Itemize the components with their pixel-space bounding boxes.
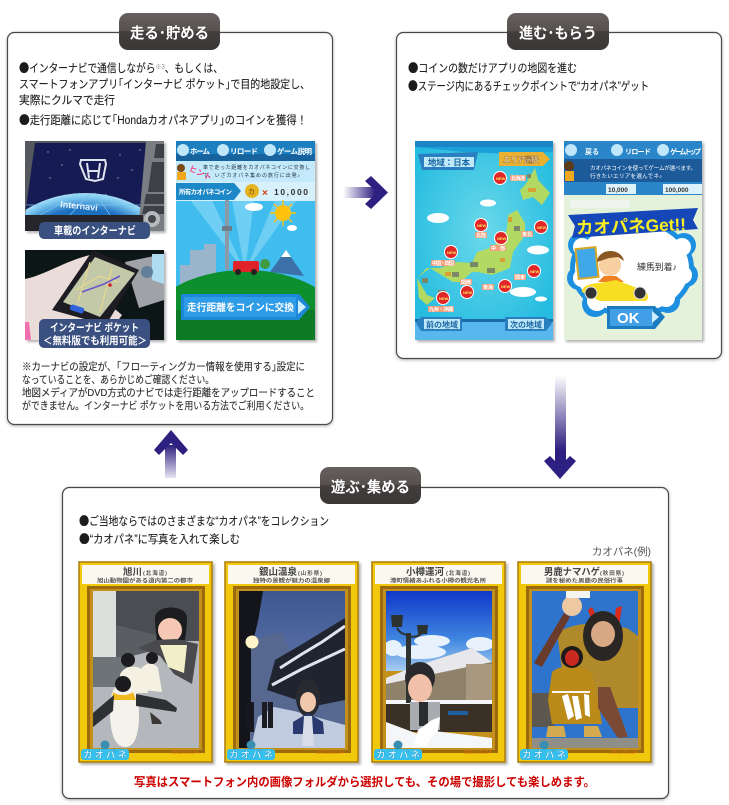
heading: 走る・貯める: 走る･貯める [130, 25, 209, 42]
card: 旭川: カオパネ [83, 750, 127, 761]
label: 車載のインターナビ [39, 222, 150, 239]
card: 男鹿ナマハゲ: 謎を秘めた男鹿の民俗行事 [546, 576, 624, 584]
app screen: coin exchange: 走行距離をコインに交換 [187, 301, 294, 314]
card: 銀山温泉 [225, 562, 358, 762]
text block: instructions: ●インターナビで通信しながら [19, 59, 179, 76]
app screen: coin exchange: ホーム [190, 147, 210, 156]
app screen: Japan map: NEW [530, 269, 540, 274]
text block: steps: ●コインの数だけアプリの地図を進む [408, 59, 577, 76]
card: 銀山温泉: 銀山温泉 [259, 566, 297, 578]
card: 男鹿ナマハゲ: カオパネ [522, 750, 566, 761]
text block: collection: ●ご当地ならではのさまざまな“カオパネ”をコレクション [79, 512, 329, 529]
app screen: Japan map: 北海道 [511, 175, 525, 182]
photo: in-car navigation: Internavi [60, 199, 98, 213]
card: 旭川: 2013.02.24 [171, 750, 199, 756]
app screen: Japan map: 九州・沖縄 [429, 306, 453, 313]
label: インターナビ ポケット: ＜無料版でも利用可能＞ [43, 334, 147, 347]
callout: red note: 写真はスマートフォン内の画像フォルダから選択しても、その場で撮影しても楽しめます。 [134, 774, 595, 789]
photo: in-car navigation [25, 141, 168, 234]
text block: instructions: スマートフォンアプリ｢インターナビ ポケット｣で目的地設定し、 [19, 77, 310, 91]
card: 小樽運河: 港町情緒あふれる小樽の観光名所 [390, 576, 487, 584]
card: 旭川 [79, 562, 212, 762]
app screen: Japan map: NEW [496, 176, 506, 181]
text block: footnote: 地図メディアがDVD方式のナビでは走行距離をアップロードすること [22, 386, 315, 399]
app screen: Japan map: NEW [439, 296, 449, 301]
card: 小樽運河 [372, 562, 505, 762]
text block: instructions [19, 59, 310, 128]
caption: カオパネ（例）: カオパネ(例) [592, 545, 651, 558]
text block: footnote: ができません。インターナビ ポケットを用いる方法でご利用ください。 [22, 399, 309, 412]
photo: snowy hot spring town [239, 591, 345, 748]
panel: 走る・貯める [0, 13, 345, 424]
card: 銀山温泉: カオパネ [229, 750, 273, 761]
app screen: coin exchange: ヒント [188, 164, 213, 182]
card: 旭川: 旭山動物園がある道内第二の都市 [97, 576, 194, 584]
app screen: Japan map: 次の地域 [510, 320, 542, 330]
app screen: Japan map [415, 141, 553, 340]
app screen: カオパネGet: 戻る [585, 148, 599, 156]
photo: Otaru canal [384, 591, 494, 748]
label: インターナビ ポケット: インターナビ ポケット [50, 321, 139, 334]
app screen: Japan map: NEW [477, 223, 487, 228]
arrow: down [544, 375, 576, 479]
app screen: カオパネGet: 行きたいエリアを選んでネ♪ [590, 172, 662, 180]
text block: footnote [22, 360, 315, 412]
card: 小樽運河: (北海道) [446, 569, 470, 577]
card: 男鹿ナマハゲ: 男鹿ナマハゲ [544, 566, 600, 578]
app screen: カオパネGet: OK [617, 310, 640, 327]
text block: instructions: ●走行距離に応じて｢Hondaカオパネアプリ｣のコインを獲得！ [19, 111, 307, 128]
app screen: カオパネGet: カオパネコインを使ってゲームが選べます。 [590, 164, 696, 172]
app screen: カオパネGet: カオパネGet!! [576, 215, 686, 238]
app screen: coin exchange [176, 141, 318, 344]
app screen: Japan map: NEW [463, 290, 473, 295]
card: 男鹿ナマハゲ: (秋田県) [600, 569, 624, 577]
card: 銀山温泉: 2013.02.24 [317, 750, 345, 756]
heading: 遊ぶ・集める [320, 467, 421, 504]
app screen: coin exchange: 所有カオパネコイン [179, 187, 232, 196]
card: 小樽運河: 小樽運河 [406, 566, 444, 578]
app screen: coin exchange: て、いざカオパネ集めの旅行に出発♪ [203, 172, 300, 179]
app screen: カオパネGet: 100,000 [665, 187, 689, 194]
panel: 進む・もらう [396, 13, 722, 358]
app screen: Japan map: 東北 [522, 231, 532, 238]
label: インターナビ ポケット [39, 319, 150, 348]
panel: 遊ぶ・集める [62, 467, 668, 798]
app screen: Japan map: 東海 [483, 284, 493, 291]
app screen: Japan map: NEW [501, 284, 511, 289]
app screen: coin exchange: 車で走った距離をカオパネコインに交換し [203, 164, 310, 171]
app screen: coin exchange: カ [248, 188, 255, 196]
text block: footnote: なっていることを、あらかじめご確認ください。 [22, 373, 214, 386]
card: 旭川: (北海道) [143, 569, 167, 577]
photo: smartphone with navigation [25, 250, 164, 340]
app screen: Japan map: NEW [537, 225, 547, 230]
text block: footnote: ※カーナビの設定が、｢フローティングカー情報を使用する｣設定に [22, 360, 305, 373]
app screen: coin exchange: リロード [230, 147, 258, 156]
app screen: Japan map: 関西 [461, 279, 471, 286]
heading: 走る・貯める [119, 13, 220, 50]
heading: 遊ぶ・集める: 遊ぶ･集める [331, 478, 410, 496]
app screen: Japan map: 前の地域 [426, 320, 458, 330]
text block: steps: ●ステージ内にあるチェックポイントで“カオパネ”ゲット [408, 77, 649, 94]
app screen: Japan map: 関東 [515, 274, 525, 281]
arrow: right [343, 176, 388, 209]
app screen: coin exchange: ゲーム説明 [277, 146, 312, 156]
app screen: カオパネGet: リロード [625, 148, 651, 156]
app screen: カオパネGet [564, 141, 702, 340]
card: 旭川: 旭川 [123, 566, 142, 578]
text block: steps [408, 59, 649, 94]
heading: 進む・もらう: 進む･もらう [519, 25, 597, 42]
app screen: Japan map: 中国・四国 [432, 260, 454, 267]
app screen: coin exchange: 10,000 [274, 187, 308, 197]
app screen: Japan map: エリア選択 [503, 154, 539, 164]
app screen: Japan map: NEW [497, 236, 507, 241]
label: 車載のインターナビ: 車載のインターナビ [54, 224, 136, 237]
card: 男鹿ナマハゲ [518, 562, 651, 762]
card: 男鹿ナマハゲ: 2013.02.24 [610, 750, 638, 756]
text block: instructions: 、もしくは、 [165, 62, 223, 75]
app screen: Japan map: NEW [447, 250, 457, 255]
text block: collection [79, 512, 329, 547]
app screen: Japan map: 中部 [491, 245, 505, 252]
app screen: Japan map: 北陸 [476, 232, 486, 239]
card: 小樽運河: カオパネ [376, 750, 420, 761]
card: 小樽運河: 2013.02.24 [464, 750, 492, 756]
photo: penguins [93, 591, 199, 748]
heading: 進む・もらう [507, 13, 609, 50]
card: 銀山温泉: (山形県) [298, 569, 322, 577]
app screen: coin exchange: × [262, 188, 268, 199]
text block: instructions: ※3 [155, 63, 165, 71]
card: 銀山温泉: 独特の景観が魅力の温泉郷 [253, 576, 331, 584]
app screen: Japan map: 地域：日本 [428, 158, 470, 168]
app screen: カオパネGet: ゲームトップ [670, 147, 701, 156]
text block: instructions: 実際にクルマで走行 [19, 94, 115, 107]
app screen: カオパネGet: 練馬到着♪ [637, 261, 677, 272]
text block: collection: ●“カオパネ”に写真を入れて楽しむ [79, 530, 240, 547]
photo: Namahage statue [532, 591, 638, 748]
app screen: カオパネGet: 10,000 [608, 187, 628, 194]
arrow: up [154, 430, 188, 478]
